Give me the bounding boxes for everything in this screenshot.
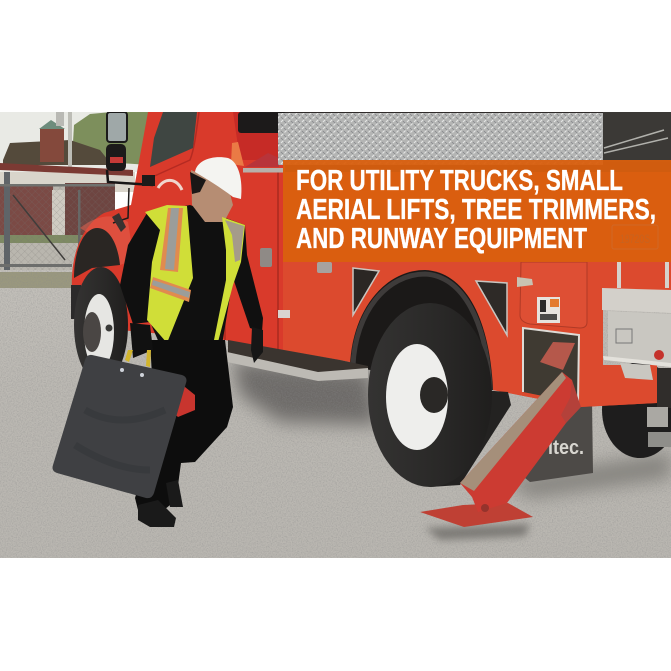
vest reflective stripes xyxy=(150,208,244,302)
photo scene with banner xyxy=(0,112,671,558)
diamond plate toolbox xyxy=(278,113,603,165)
red strap behind leg xyxy=(176,386,195,417)
rear tandem wheel with rim xyxy=(368,303,511,487)
worker xyxy=(120,157,263,527)
side mirrors xyxy=(106,112,155,232)
background: sky, trees and buildings xyxy=(0,112,160,192)
worker black shirt and arms xyxy=(120,205,263,345)
faint licence plate behind banner: 19720S xyxy=(620,232,650,246)
body compartment details xyxy=(260,248,587,328)
truck cab and body xyxy=(72,112,671,407)
black outrigger pad xyxy=(52,355,186,498)
rear wheel arch xyxy=(350,270,493,390)
upper right rack xyxy=(603,112,671,162)
mud flap with brand text xyxy=(525,406,593,482)
running board step xyxy=(227,340,368,381)
cab door emblem xyxy=(158,180,182,190)
mud flap with brand text: ltec. xyxy=(548,437,584,459)
orange banner xyxy=(283,160,671,262)
worker hi-vis vest xyxy=(145,205,245,343)
front wheel xyxy=(71,267,128,368)
worker hair and face xyxy=(191,170,233,222)
worker trousers and shoes xyxy=(135,340,233,510)
rear truck wheel xyxy=(602,362,671,458)
banner heading: AND RUNWAY EQUIPMENT xyxy=(296,223,587,255)
ground xyxy=(0,270,671,558)
outrigger jack xyxy=(420,342,581,527)
worker gloves xyxy=(130,323,153,358)
jack slot xyxy=(523,328,579,403)
chain-link fence xyxy=(0,172,115,270)
front wheel arch xyxy=(74,228,120,278)
rear chrome box xyxy=(602,262,671,447)
banner heading xyxy=(296,165,656,255)
worker hard hat xyxy=(195,157,241,199)
cab window xyxy=(150,112,197,167)
triangular body vents xyxy=(353,268,507,335)
faint licence plate behind banner xyxy=(612,225,658,249)
